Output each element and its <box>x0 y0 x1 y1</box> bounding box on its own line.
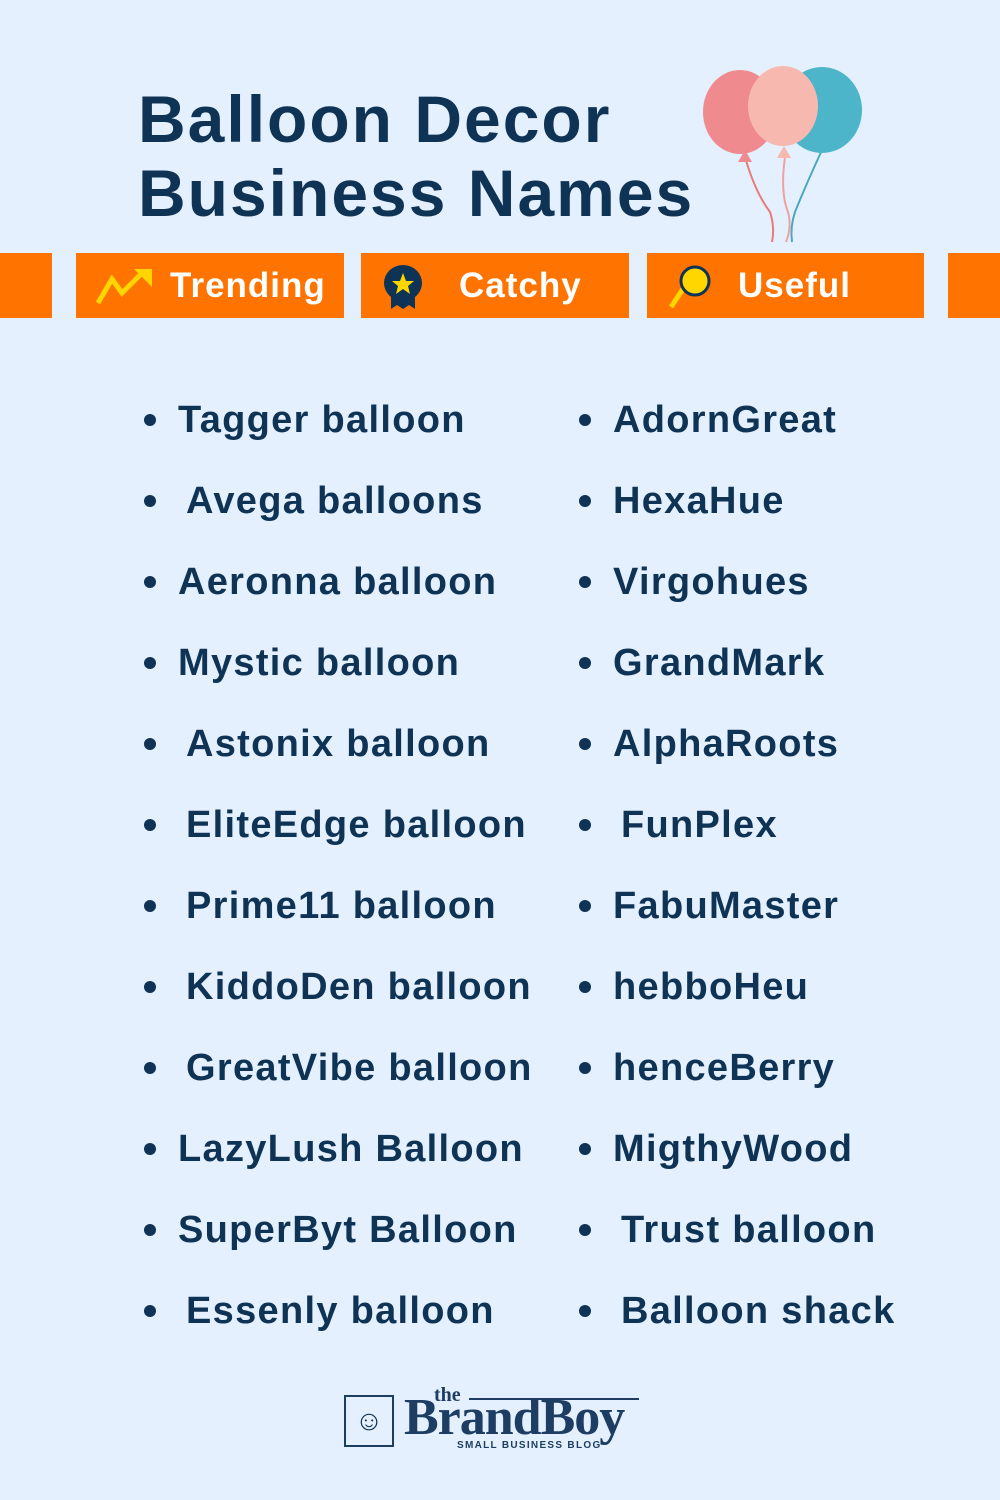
list: left column: Prime11 balloon <box>186 885 497 927</box>
list: right column: MigthyWood <box>613 1128 853 1170</box>
list: left column: Astonix balloon <box>186 723 490 765</box>
tab: useful <box>647 253 924 318</box>
list: right column: henceBerry <box>613 1047 835 1089</box>
list: left column <box>144 399 533 1332</box>
title: Balloon Decor <box>138 82 611 156</box>
banner left edge <box>0 253 52 318</box>
list: left column: Mystic balloon <box>178 642 460 684</box>
list: left column: KiddoDen balloon <box>186 966 532 1008</box>
list: right column: HexaHue <box>613 480 785 522</box>
list: left column: Aeronna balloon <box>178 561 497 603</box>
tab: trending: Trending <box>170 266 326 305</box>
list: left column: Tagger balloon <box>178 399 466 441</box>
tab: catchy: Catchy <box>459 266 582 305</box>
list: right column: GrandMark <box>613 642 825 684</box>
list: right column: AlphaRoots <box>613 723 839 765</box>
list: right column: Virgohues <box>613 561 810 603</box>
list: right column: hebboHeu <box>613 966 809 1008</box>
logo <box>344 1384 639 1451</box>
icon: balloons <box>703 66 862 242</box>
list: left column: Avega balloons <box>186 480 484 522</box>
banner right edge <box>948 253 1000 318</box>
list: left column: SuperByt Balloon <box>178 1209 518 1251</box>
list: right column: Trust balloon <box>621 1209 876 1251</box>
tab: catchy <box>361 253 629 318</box>
list: right column: Balloon shack <box>621 1290 896 1332</box>
list: right column: FunPlex <box>621 804 778 846</box>
list: right column: FabuMaster <box>613 885 839 927</box>
list: left column: Essenly balloon <box>186 1290 495 1332</box>
tab: trending <box>76 253 344 318</box>
title: Business Names <box>138 156 694 230</box>
logo: ☺ <box>355 1405 383 1436</box>
list: left column: EliteEdge balloon <box>186 804 527 846</box>
title <box>138 82 694 230</box>
logo: BrandBoy <box>404 1389 624 1446</box>
logo: SMALL BUSINESS BLOG <box>457 1440 602 1451</box>
list: right column: AdornGreat <box>613 399 837 441</box>
logo: the <box>434 1384 461 1406</box>
list: left column: GreatVibe balloon <box>186 1047 533 1089</box>
tab: useful: Useful <box>738 266 851 305</box>
list: left column: LazyLush Balloon <box>178 1128 524 1170</box>
list: right column <box>579 399 896 1332</box>
